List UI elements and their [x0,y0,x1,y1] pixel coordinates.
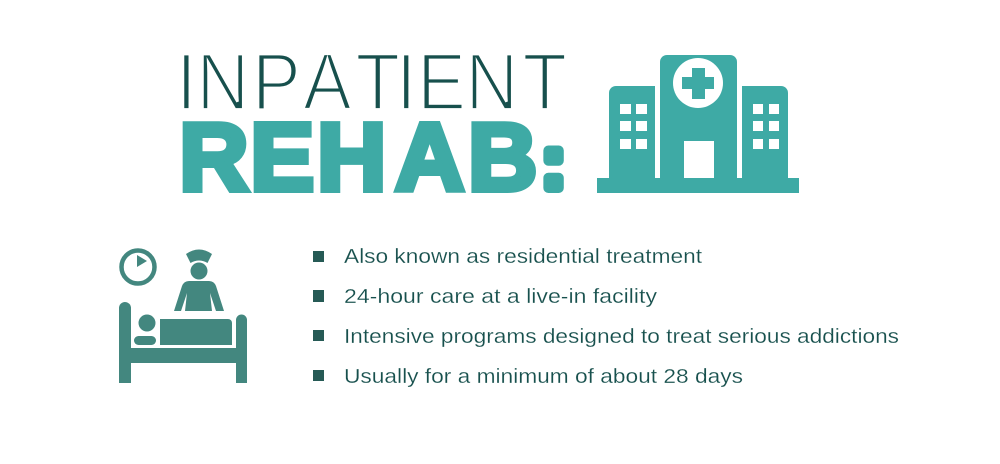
icon: hospital [597,55,799,193]
bullet list [313,245,899,388]
icon: bed with patient [119,302,247,383]
title line: REHAB: : [541,121,566,204]
icon: clock [122,250,154,284]
icon: nurse at bedside with clock [119,250,247,383]
bullet 4: Usually for a minimum of about 28 days [344,365,743,388]
title line: INPATIENT: INPATIENT [176,37,567,127]
icon: nurse [174,250,224,311]
bullet 1: Also known as residential treatment [344,245,702,268]
title [176,37,567,211]
bullet 3: Intensive programs designed to treat serious addictions [344,325,899,348]
title line: REHAB: REHAB [179,104,537,211]
bullet 2: 24-hour care at a live-in facility [344,285,658,308]
